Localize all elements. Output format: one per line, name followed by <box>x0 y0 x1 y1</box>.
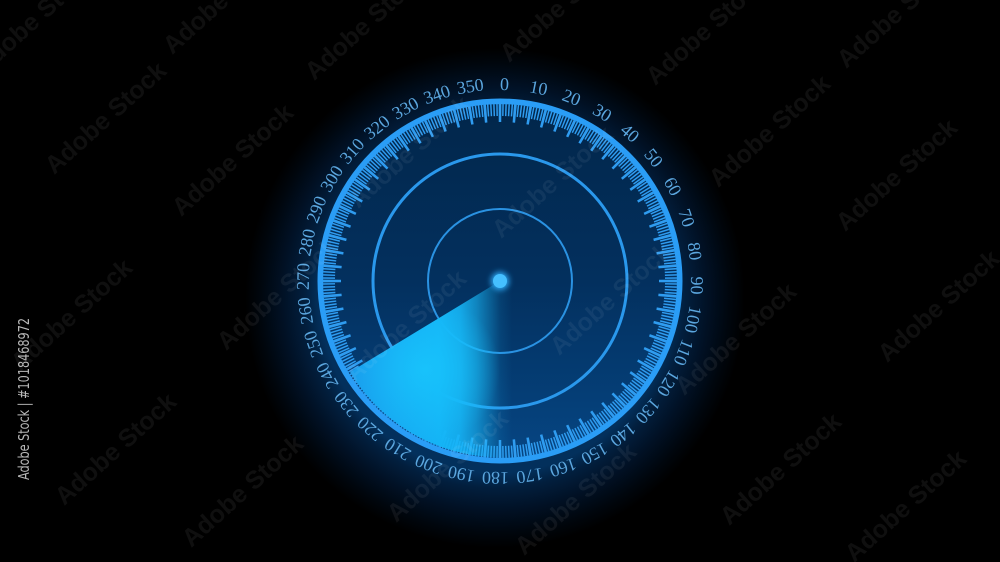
degree scale labels: 100 <box>681 304 706 335</box>
degree scale labels: 110 <box>669 337 698 368</box>
degree scale labels: 50 <box>640 145 667 171</box>
degree scale labels: 300 <box>316 162 347 195</box>
degree scale labels: 340 <box>421 81 453 108</box>
degree scale labels: 260 <box>293 296 317 326</box>
degree scale labels: 170 <box>515 464 545 488</box>
degree scale labels: 10 <box>528 76 549 99</box>
watermarks: Adobe Stock <box>6 253 138 377</box>
watermarks: Adobe Stock <box>715 407 847 531</box>
minor tick marks <box>329 110 671 452</box>
watermarks: Adobe Stock <box>212 232 344 356</box>
degree scale labels: 330 <box>389 93 422 123</box>
degree scale labels: 120 <box>653 367 684 400</box>
watermarks: Adobe Stock <box>831 113 963 237</box>
degree scale labels: 270 <box>293 263 313 290</box>
degree scale labels: 200 <box>412 450 445 479</box>
watermarks: Adobe Stock <box>382 404 514 528</box>
watermarks: Adobe Stock <box>344 90 476 214</box>
degree scale labels: 350 <box>455 74 485 98</box>
degree scale labels: 160 <box>547 454 579 481</box>
degree scale labels: 220 <box>353 413 387 445</box>
degree scale labels: 0 <box>500 74 509 94</box>
watermarks: Adobe Stock <box>177 429 309 553</box>
watermarks: Adobe Stock <box>50 387 182 511</box>
degree scale labels: 150 <box>578 439 611 469</box>
center dot <box>493 274 507 288</box>
inner ring <box>428 209 572 353</box>
watermarks: Adobe Stock <box>704 69 836 193</box>
watermarks: Adobe Stock <box>545 237 677 361</box>
degree scale labels: 140 <box>606 418 640 451</box>
degree scale labels: 280 <box>294 227 319 258</box>
degree scale labels: 60 <box>660 174 686 199</box>
degree scale labels: 70 <box>674 206 699 230</box>
degree scale labels <box>293 74 707 488</box>
watermarks: Adobe Stock <box>40 56 172 180</box>
degree scale labels: 30 <box>589 99 615 126</box>
radar outer glow <box>245 48 745 548</box>
degree scale labels: 320 <box>360 111 394 144</box>
degree scale labels: 40 <box>617 120 643 146</box>
degree scale labels: 210 <box>381 434 414 465</box>
degree scale labels: 130 <box>632 394 664 428</box>
degree scale labels: 80 <box>683 241 706 262</box>
major tick marks <box>332 113 668 449</box>
watermarks: Adobe Stock <box>670 277 802 401</box>
degree scale labels: 250 <box>300 328 327 360</box>
panel: radar disc <box>320 101 680 461</box>
watermarks: Adobe Stock <box>510 437 642 561</box>
degree scale labels: 230 <box>330 387 363 421</box>
degree scale labels: 290 <box>302 193 331 226</box>
center dot glow <box>491 272 509 290</box>
watermarks: Adobe Stock <box>167 98 299 222</box>
outer ring <box>320 101 680 461</box>
degree scale labels: 310 <box>336 134 368 168</box>
watermarks: Adobe Stock <box>340 264 472 388</box>
stock id text: Adobe Stock | #1018468972 <box>15 318 33 480</box>
degree scale labels: 240 <box>312 359 342 392</box>
degree scale labels: 190 <box>446 462 477 487</box>
middle ring <box>373 154 627 408</box>
degree scale labels: 180 <box>482 468 509 488</box>
watermarks: Adobe Stock <box>487 120 619 244</box>
degree scale labels: 90 <box>687 276 707 295</box>
radar sweep beam <box>350 281 512 457</box>
degree scale labels: 20 <box>560 85 584 110</box>
